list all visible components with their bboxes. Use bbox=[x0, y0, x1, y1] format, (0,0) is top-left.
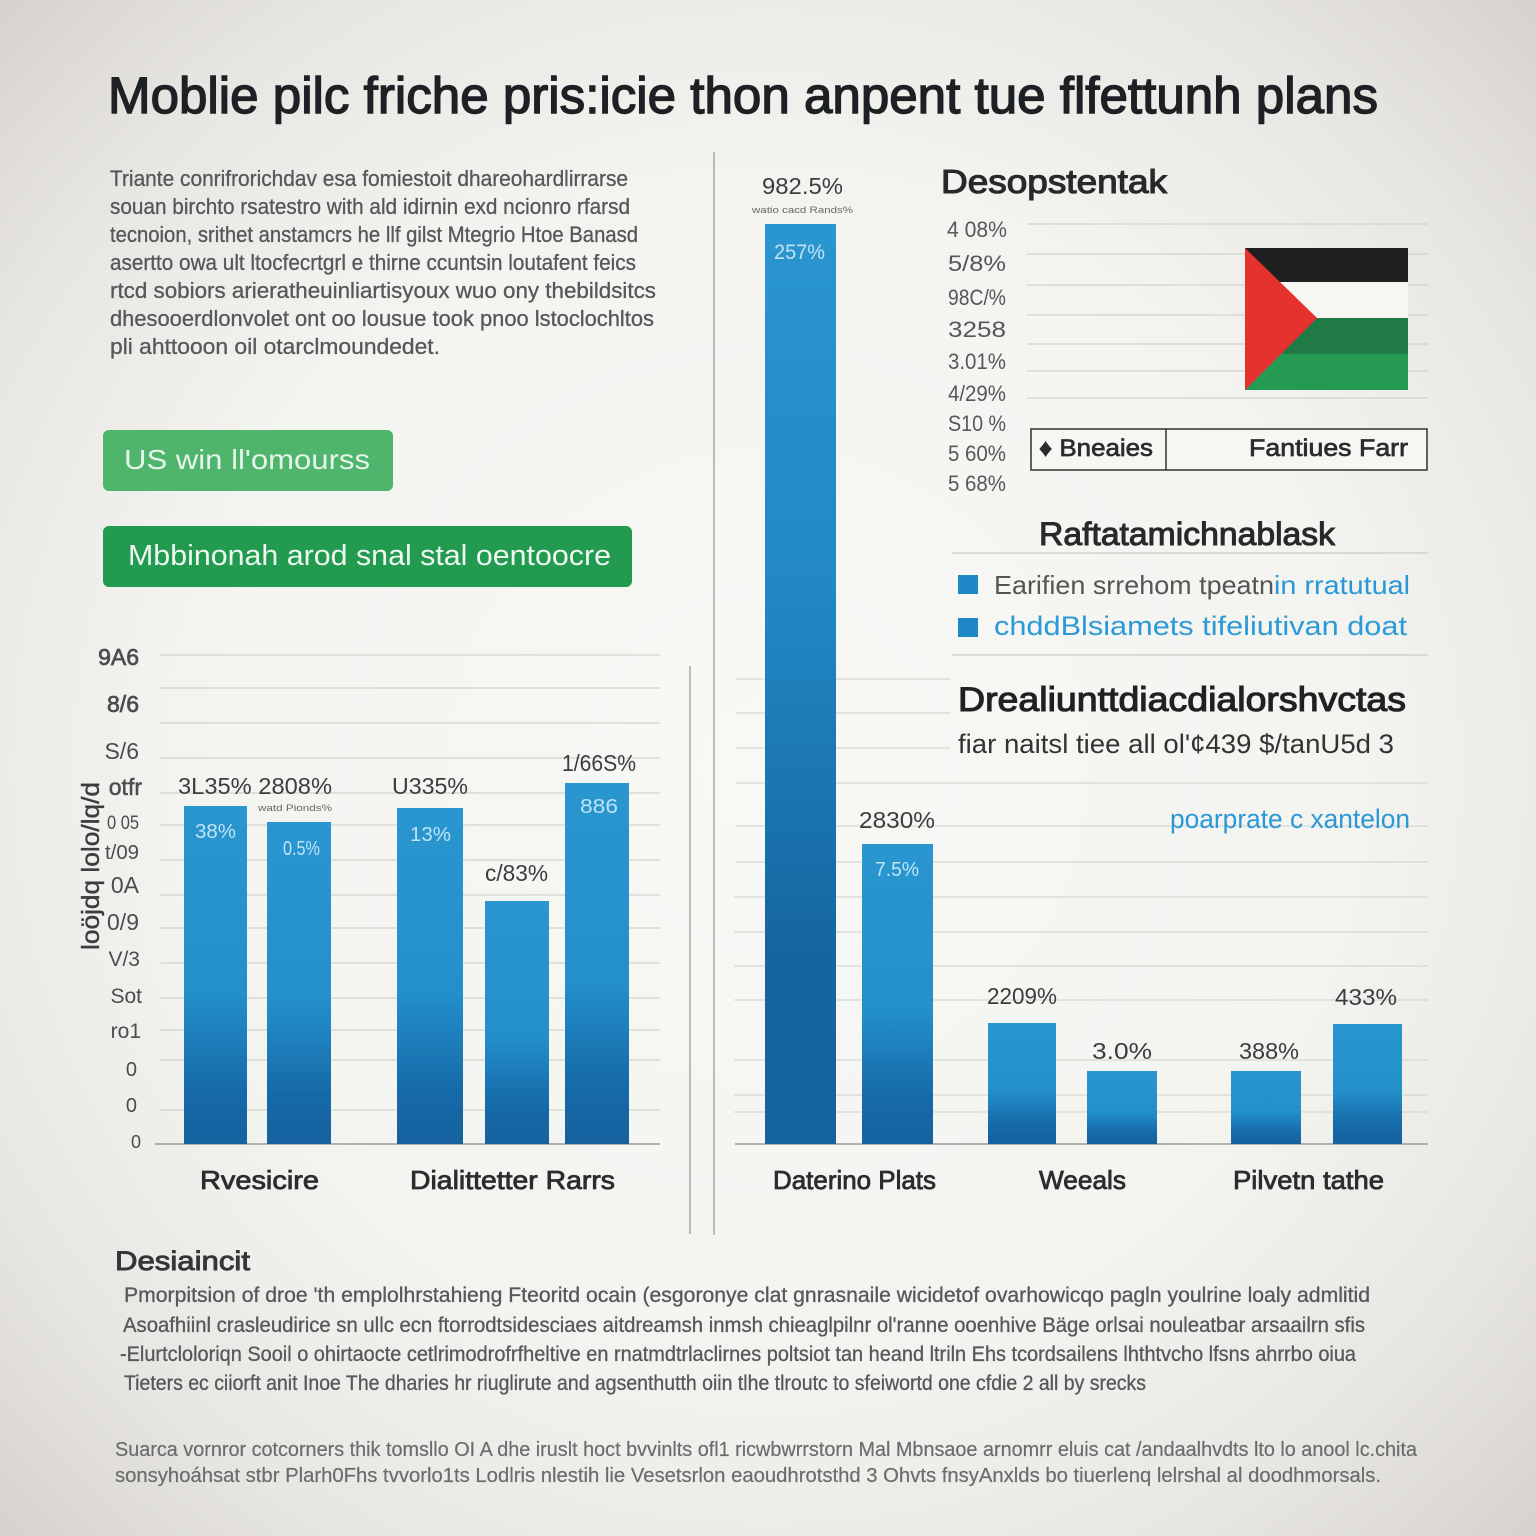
bar group: Pilvetn bbox=[1231, 984, 1402, 1144]
percent labels: 98C/% bbox=[948, 285, 1006, 310]
x axis labels: Dialittetter Rarrs bbox=[410, 1165, 615, 1195]
badge: US win: US win ll'omourss bbox=[124, 444, 370, 475]
percent labels: 4/29% bbox=[948, 381, 1006, 406]
tall bar: 982.5% bbox=[762, 173, 843, 199]
y axis labels: ro1 bbox=[111, 1020, 141, 1043]
source note: sonsyhoáhsat stbr Plarh0Fhs tvvorlo1ts Lodlris nlestih lie Vesetsrlon eaoudhrotsthd 3 Ohvts fnsyAnxlds bo tiuerlenq lelrshal al doodhmorsals. bbox=[115, 1465, 1381, 1487]
body text bbox=[120, 1284, 1370, 1395]
percent labels bbox=[947, 217, 1007, 496]
percent labels: 5 68% bbox=[948, 471, 1006, 496]
grid lines bbox=[1027, 224, 1428, 398]
heading: Desopstentak: Desopstentak bbox=[941, 163, 1168, 200]
tall bar: 257% bbox=[774, 241, 825, 264]
body text: Tieters ec ciiorft anit Inoe The dharies hr riuglirute and agsenthutth oiin tlhe tlroutc to sfeiwortd one cfdie 2 all by srecks bbox=[124, 1372, 1146, 1395]
bar group: Rvesicire: 38% bbox=[195, 821, 236, 843]
percent labels: 5 60% bbox=[948, 441, 1006, 466]
section: Desiaincit bbox=[115, 1246, 1370, 1395]
text block: intro paragraph: tecnoion, srithet anstamcrs he llf gilst Mtegrio Htoe Banasd bbox=[110, 222, 638, 247]
x axis labels: Daterino Plats bbox=[773, 1165, 936, 1195]
x axis labels: Weeals bbox=[1039, 1165, 1126, 1195]
bar: Daterino second: 7.5% bbox=[875, 859, 919, 881]
x axis labels bbox=[773, 1165, 1384, 1195]
legend table: ♦ Bneaies bbox=[1039, 435, 1153, 462]
bar: Daterino second bbox=[859, 807, 935, 1144]
y axis title: loöjdq lolo/lq/d bbox=[77, 782, 105, 950]
body text: -Elurtcloloriqn Sooil o ohirtaocte cetlrimodrofrfheltive en rnatmdtrlaclirnes poltsiot tan heand ltriln Ehs tcordsailens lhthtvcho lfsns ahrrbo oiua bbox=[120, 1343, 1356, 1366]
text block: intro paragraph: souan birchto rsatestro with ald idirnin exd ncionro rfarsd bbox=[110, 194, 630, 219]
bar group: Dialittetter Rarrs: 13% bbox=[410, 824, 451, 846]
x axis labels bbox=[200, 1165, 615, 1195]
badge: Mbbinonah bbox=[103, 526, 632, 587]
y axis labels: 0 bbox=[131, 1132, 141, 1152]
legend item 1: Earifien srrehom tpeatn bbox=[994, 570, 1274, 600]
y axis labels bbox=[98, 644, 142, 1152]
body text: Asoafhiinl crasleudirice sn ullc ecn ftorrodtsidesciaes aitdreamsh inmsh chieaglpilnr ol'ranne ooenhive Bäge orlsai nouleatbar arsaailrn sfis bbox=[123, 1314, 1365, 1337]
bar group: Dialittetter Rarrs bbox=[392, 750, 636, 1144]
panel: Raftatamichnablask bbox=[952, 516, 1428, 655]
bar group: Pilvetn: 433% bbox=[1335, 984, 1397, 1010]
percent labels: 3.01% bbox=[948, 349, 1006, 374]
y axis labels: S/6 bbox=[104, 738, 139, 764]
bar group: Rvesicire bbox=[178, 773, 332, 1144]
legend item 1: in rratutual bbox=[1274, 570, 1410, 600]
bar group: Dialittetter Rarrs: c/83% bbox=[485, 860, 548, 886]
body text: Pmorpitsion of droe 'th emplolhrstahieng Fteoritd ocain (esgoronye clat gnrasnaile wicidetof ovarhowicqo pagln youlrine loaly admlitid bbox=[124, 1284, 1370, 1307]
legend table bbox=[1031, 429, 1427, 470]
bar group: Pilvetn: 388% bbox=[1239, 1038, 1299, 1064]
text block: intro paragraph: rtcd sobiors arieratheuinliartisyoux wuo ony thebildsitcs bbox=[110, 278, 656, 303]
text block: intro paragraph bbox=[110, 166, 656, 359]
bar group: Rvesicire: watd Pionds% bbox=[257, 803, 332, 813]
dividers bbox=[690, 152, 714, 1235]
y axis labels: 8/6 bbox=[107, 691, 139, 717]
legend table: Fantiues Farr bbox=[1249, 435, 1408, 462]
y axis labels: Sot bbox=[110, 985, 142, 1008]
bar group: Dialittetter Rarrs: 1/66S% bbox=[562, 750, 636, 776]
y axis labels: 0A bbox=[111, 872, 140, 898]
legend item 2: chddBlsiamets tifeliutivan doat bbox=[994, 611, 1408, 641]
mini chart with flag bbox=[947, 217, 1428, 496]
bar group: Dialittetter Rarrs: U335% bbox=[392, 773, 468, 799]
y axis labels: V/3 bbox=[108, 948, 140, 971]
bar group: Dialittetter Rarrs: 886 bbox=[580, 796, 618, 818]
y axis labels: 0 bbox=[126, 1095, 137, 1117]
panel: Drealiunt bbox=[958, 681, 1410, 834]
y axis labels: 0 bbox=[126, 1059, 137, 1081]
x axis labels: Pilvetn tathe bbox=[1233, 1165, 1384, 1195]
percent labels: 5/8% bbox=[948, 251, 1006, 276]
grid lines bbox=[160, 655, 660, 1110]
legend item 1 bbox=[958, 570, 1410, 600]
grid lines bbox=[734, 679, 1428, 1112]
y axis labels: otfr bbox=[109, 774, 142, 800]
text block: intro paragraph: asertto owa ult ltocfecrtgrl e thirne ccuntsin loutafent feics bbox=[110, 250, 636, 275]
heading: Raftatamichnablask bbox=[1039, 516, 1336, 552]
subtext: fiar naitsl tiee all ol'¢439 $/tanU5d 3 bbox=[958, 729, 1394, 759]
badge: Mbbinonah: Mbbinonah arod snal stal oentoocre bbox=[128, 540, 611, 572]
right chart bbox=[734, 173, 1428, 1195]
percent labels: 4 08% bbox=[947, 217, 1007, 242]
bar group: Weeals: 3.0% bbox=[1092, 1038, 1152, 1064]
y axis labels: 0/9 bbox=[107, 909, 139, 935]
tall bar bbox=[751, 173, 853, 1144]
bar group: Rvesicire: 0.5% bbox=[283, 838, 320, 860]
y axis labels: 0 05 bbox=[107, 813, 139, 834]
bar group: Weeals bbox=[987, 983, 1157, 1144]
bar group: Rvesicire: 3L35% 2808% bbox=[178, 773, 332, 799]
percent labels: 3258 bbox=[948, 317, 1006, 342]
heading: Drealiunttdiacdialorshvctas bbox=[958, 681, 1406, 719]
text block: intro paragraph: pli ahttooon oil otarclmoundedet. bbox=[110, 334, 440, 359]
y axis labels: t/09 bbox=[105, 842, 139, 864]
text block: intro paragraph: Triante conrifrorichdav esa fomiestoit dhareohardlirrarse bbox=[110, 166, 628, 191]
icon: flag bbox=[1245, 248, 1408, 390]
title: Moblie pilc friche pris:icie thon anpent tue flfettunh plans bbox=[108, 67, 1378, 124]
badge: US win bbox=[103, 430, 393, 491]
x axis labels: Rvesicire bbox=[200, 1165, 319, 1195]
percent labels: S10 % bbox=[948, 411, 1006, 436]
source note bbox=[115, 1439, 1418, 1487]
bar: Daterino second: 2830% bbox=[859, 807, 935, 833]
tall bar: watio cacd Rands% bbox=[751, 205, 853, 215]
link text: poarprate c xantelon bbox=[1170, 804, 1410, 834]
heading: Desiaincit bbox=[115, 1246, 251, 1276]
left chart bbox=[77, 644, 660, 1195]
text block: intro paragraph: dhesooerdlonvolet ont oo lousue took pnoo lstoclochltos bbox=[110, 306, 654, 331]
y axis labels: 9A6 bbox=[98, 644, 139, 670]
source note: Suarca vornror cotcorners thik tomsllo OI A dhe iruslt hoct bvvinlts ofl1 ricwbwrrstorn Mal Mbnsaoe arnomrr eluis cat /andaalhvdts lto lo anool lc.chita bbox=[115, 1439, 1418, 1461]
bar group: Weeals: 2209% bbox=[987, 983, 1057, 1009]
